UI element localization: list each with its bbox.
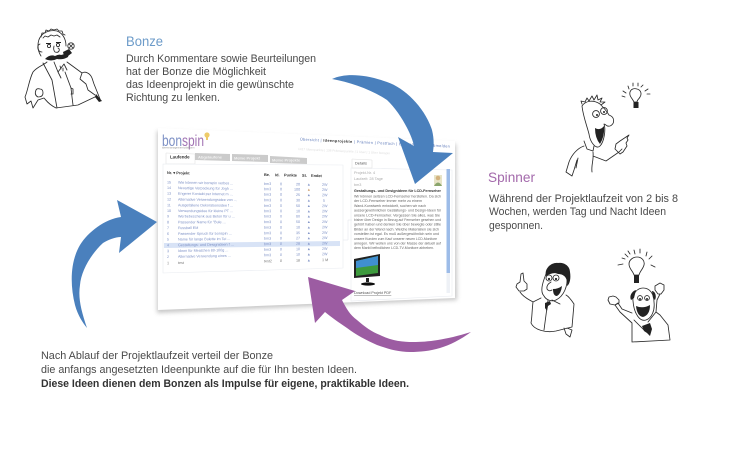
table rows: 50 [296, 220, 300, 224]
text block: conclusion: Nach Ablauf der Projektlaufzeit verteil der Bonze [41, 350, 273, 362]
table rows: ▲ [307, 258, 311, 262]
text block: Bonze description: Richtung zu lenken. [126, 92, 220, 104]
text block: Spinner description [489, 193, 678, 232]
table rows: 2W [322, 209, 328, 213]
project title: Gestaltungs- und Designideen für LCD-Fernseher [354, 188, 441, 193]
project description: Bilder an der Wand nach. Welche Materialien sie sich [354, 227, 439, 231]
table rows: ▲ [307, 183, 311, 187]
table rows: Passender Name für "Bule ... [178, 220, 226, 224]
table rows: 10 [296, 209, 300, 213]
table rows: 2W [322, 241, 328, 245]
table rows: ▲ [307, 215, 311, 219]
table rows: 13 [167, 192, 171, 196]
project description: unsere Kunden zum Kauf unserer neuen LCD-Monitore [354, 237, 437, 241]
sub navigation: 1417 Ideenpunkte | 138 Prämienpunkte | 1 User | 1 Über bonspin [298, 147, 390, 155]
table rows: 0 [280, 242, 282, 246]
monitor image [354, 254, 380, 286]
table rows: bm3 [264, 231, 271, 235]
table rows: 0 [280, 231, 282, 235]
table rows: 1 [167, 261, 169, 265]
table rows: 18 [296, 259, 300, 263]
heading: Bonze: Bonze [126, 33, 163, 49]
table rows: 25 [296, 193, 300, 197]
table rows: bm3 [264, 198, 271, 202]
screenshot: bonspin idea project page [157, 128, 457, 313]
table rows: Name für lange Bulette im Tei ... [178, 237, 230, 242]
table rows: 2W [322, 193, 328, 197]
tabs: Meine Projekte [272, 158, 301, 162]
table rows: 35 [296, 231, 300, 235]
heading: Spinner: Spinner [488, 169, 535, 185]
table rows: 2W [322, 252, 328, 256]
Bonze body [25, 62, 100, 108]
tabs: Meine Projekt [234, 156, 261, 160]
project description: unsere LCD-Fernseher. Vergessen Sie alles, was Sie [354, 213, 440, 217]
navigation links: Übersicht | Ideenprojekte | Prämien | Postfach | Einstellungen | Abmelden [300, 138, 450, 149]
selected row highlight [164, 241, 340, 248]
table rows: Gestaltungs- und Designideen f ... [178, 243, 234, 247]
icon: thinking Spinner with light bulb [566, 83, 650, 176]
project description: gehört haben und denken Sie über bewegte oder stille [354, 223, 441, 227]
head [582, 101, 614, 147]
table rows: 2W [322, 204, 328, 208]
table rows: 0 [280, 215, 282, 219]
table rows: 30 [296, 199, 300, 203]
table header [167, 170, 323, 178]
table rows: 5 [323, 199, 325, 203]
table header: Be. [264, 172, 270, 177]
table rows: Neuartige Verpackung für Jogh ... [178, 186, 233, 191]
project description: vorstellen ist egal. Es muß außergewöhnlich sein und [354, 232, 439, 236]
table rows: 0 [280, 247, 282, 251]
table rows: bm3 [264, 253, 271, 257]
table rows: ▲ [307, 193, 311, 197]
table rows: Alternative Verwendungsidee von ... [178, 198, 237, 202]
project description: der LCD-Fernseher immer mehr zu einem [354, 199, 422, 203]
table rows: 10 [296, 247, 300, 251]
arrow: blue top, from Bonze to screenshot [332, 75, 453, 184]
icon: Spinner pointing finger [516, 263, 574, 337]
table header: Endet [311, 173, 323, 178]
table rows: 100 [294, 188, 300, 192]
table rows: Werbebeschenk aus Beton für u ... [178, 215, 235, 219]
text block: Spinner description: gesponnen. [489, 220, 543, 232]
table rows: test [178, 261, 184, 265]
table rows: 5 [167, 238, 169, 242]
arrow: purple, from Spinner to screenshot [308, 277, 471, 352]
tabs [166, 153, 307, 164]
table rows: Passender Spruch für bonspin ... [178, 232, 232, 236]
bold conclusion line: Diese Ideen dienen dem Bonzen als Impulse für eigene, praktikable Ideen. [41, 378, 409, 390]
table rows: 0 [280, 236, 282, 240]
table rows: ▲ [307, 199, 311, 203]
table rows: Wie können wir bonspin verbes ... [178, 181, 233, 186]
details panel: Details [355, 160, 367, 166]
project description: dem Markt befindlichen LCD-TV-Monitore abheben. [354, 246, 434, 250]
Bonze head [38, 29, 74, 60]
table rows: ▲ [307, 247, 311, 251]
logo: bonspin: bonspin [162, 133, 204, 150]
table rows: 3 [167, 249, 169, 253]
table rows: test2 [264, 259, 272, 263]
text block: conclusion: die anfangs angesetzten Ideenpunkte auf die für Ihn besten Ideen. [41, 364, 357, 376]
text block: Spinner description: Während der Projektlaufzeit von 2 bis 8 [489, 193, 678, 205]
table rows: ▲ [307, 204, 311, 208]
table rows: 28 [296, 242, 300, 246]
table rows: 0 [280, 226, 282, 230]
table rows: 2W [322, 247, 328, 251]
light bulb [618, 249, 655, 283]
table rows: 7 [167, 226, 169, 230]
project description: aussergewöhnlichen Gestaltungs- und Design-Ideen für [354, 209, 442, 213]
table rows: 12 [167, 198, 171, 202]
table rows: bm3 [264, 242, 271, 246]
table rows: bm3 [264, 187, 271, 191]
table rows: 60 [296, 215, 300, 219]
head [542, 274, 567, 301]
table rows: Verwendungsidee für kleine PT ... [178, 209, 233, 213]
table rows: 15 [167, 181, 171, 185]
light bulb [622, 83, 650, 108]
table rows: 2W [322, 215, 328, 219]
project metadata: Laufzeit: 28 Tage [354, 177, 383, 181]
table rows: 10 [167, 209, 171, 213]
body and arms [615, 294, 670, 342]
table rows: ▲ [307, 220, 311, 224]
body and arm [520, 292, 574, 337]
table rows: bm3 [264, 215, 271, 219]
table rows: Alternative Verwendung eines ... [178, 254, 231, 259]
table rows: 50 [296, 204, 300, 208]
project description: bisher über Design in Bezug auf Fernseher gesehen und [354, 218, 441, 222]
table header: Nr. ▾ Projekt [167, 170, 190, 176]
table rows: bm3 [264, 204, 271, 208]
table rows: Ideen für Meatchen 80-100g ... [178, 248, 228, 253]
table rows: 1 M [322, 258, 328, 262]
table rows: 2W [322, 231, 328, 235]
table rows [167, 181, 328, 265]
table header: Id. [275, 172, 280, 177]
table rows: ▲ [307, 242, 311, 246]
table rows: 8 [167, 220, 169, 224]
table rows: 2W [322, 188, 328, 192]
table rows: 20 [296, 182, 300, 187]
table rows: ▲ [307, 252, 311, 257]
project description: Wand-Kunstwerk entwickelt, suchen wir nach [354, 204, 426, 208]
table rows: bm3 [264, 220, 271, 224]
table rows: 9 [167, 215, 169, 219]
table rows: Ausgefallene Dekorationsidee f ... [178, 203, 233, 208]
table rows: 4 [167, 243, 169, 247]
details panel [351, 159, 452, 301]
project metadata: bm3 [354, 183, 361, 187]
table rows: 6 [167, 232, 169, 236]
table rows: bm3 [264, 248, 271, 252]
avatar icon [434, 175, 442, 186]
table rows: 10 [296, 225, 300, 230]
text block: Spinner description: Wochen, werden Tag und Nacht Ideen [489, 206, 666, 218]
table header: St. [302, 173, 307, 178]
table rows: Fussball EM [178, 226, 198, 230]
project description: Wir können seitzen LCD-Fernseher herstellen. Da sich [354, 194, 441, 198]
table header: Punkte [284, 172, 298, 178]
table rows: ▲ [307, 188, 311, 192]
table rows: 0 [280, 198, 282, 202]
table rows: bm3 [264, 226, 271, 230]
table rows: 2 [167, 255, 169, 259]
scrollbar [446, 169, 450, 293]
tabs: Laufende [170, 154, 190, 160]
project description [354, 194, 442, 250]
project list panel [163, 164, 343, 273]
table rows: 2W [322, 225, 328, 229]
text block: Bonze description: Durch Kommentare sowie Beurteilungen [126, 53, 316, 65]
project metadata: Projekt-Nr. 4 [354, 171, 375, 175]
table rows: 0 [280, 220, 282, 224]
table rows: bm3 [264, 182, 271, 186]
table rows: Engerer Kontakt per Internet m ... [178, 192, 233, 196]
table rows: 2W [322, 236, 328, 240]
table rows: 27 [296, 236, 300, 240]
table rows: ▲ [307, 209, 311, 213]
head [633, 288, 654, 320]
table rows: bm3 [264, 237, 271, 241]
table rows: 0 [280, 209, 282, 213]
text block: Bonze description [126, 53, 316, 104]
icon: Spinner cheering with light bulb [608, 249, 670, 342]
table rows: bm3 [264, 209, 271, 213]
tabs: Abgelaufene [198, 154, 223, 160]
table rows: 11 [167, 203, 171, 207]
body and arm [566, 141, 622, 176]
logo: bonspin: ideenmanagement-plattform [162, 146, 194, 150]
table rows: ▲ [307, 236, 311, 240]
icon: Bonze cartoon [25, 29, 102, 108]
arrow: blue left, from screenshot to Bonze [72, 200, 157, 328]
table rows: 0 [280, 204, 282, 208]
text block: conclusion [41, 350, 409, 390]
table rows: bm3 [264, 193, 271, 197]
table rows: 0 [280, 253, 282, 257]
table rows: 0 [280, 182, 282, 186]
text block: Bonze description: hat der Bonze die Möglichkeit [126, 66, 266, 78]
download link: Download Projekt PDF [354, 291, 392, 295]
table rows: ▲ [307, 225, 311, 229]
table rows: 14 [167, 186, 171, 190]
table rows: 10 [296, 253, 300, 257]
table rows: 0 [280, 259, 282, 263]
project description: anregen. Wir wollen uns von der Masse der aktuell auf [354, 242, 441, 246]
text block: Bonze description: das Ideenprojekt in die gewünschte [126, 79, 294, 91]
table rows: ▲ [307, 231, 311, 235]
table rows: 2W [322, 220, 328, 224]
table rows: 0 [280, 193, 282, 197]
table rows: 0 [280, 187, 282, 191]
table rows: 2W [322, 183, 328, 187]
